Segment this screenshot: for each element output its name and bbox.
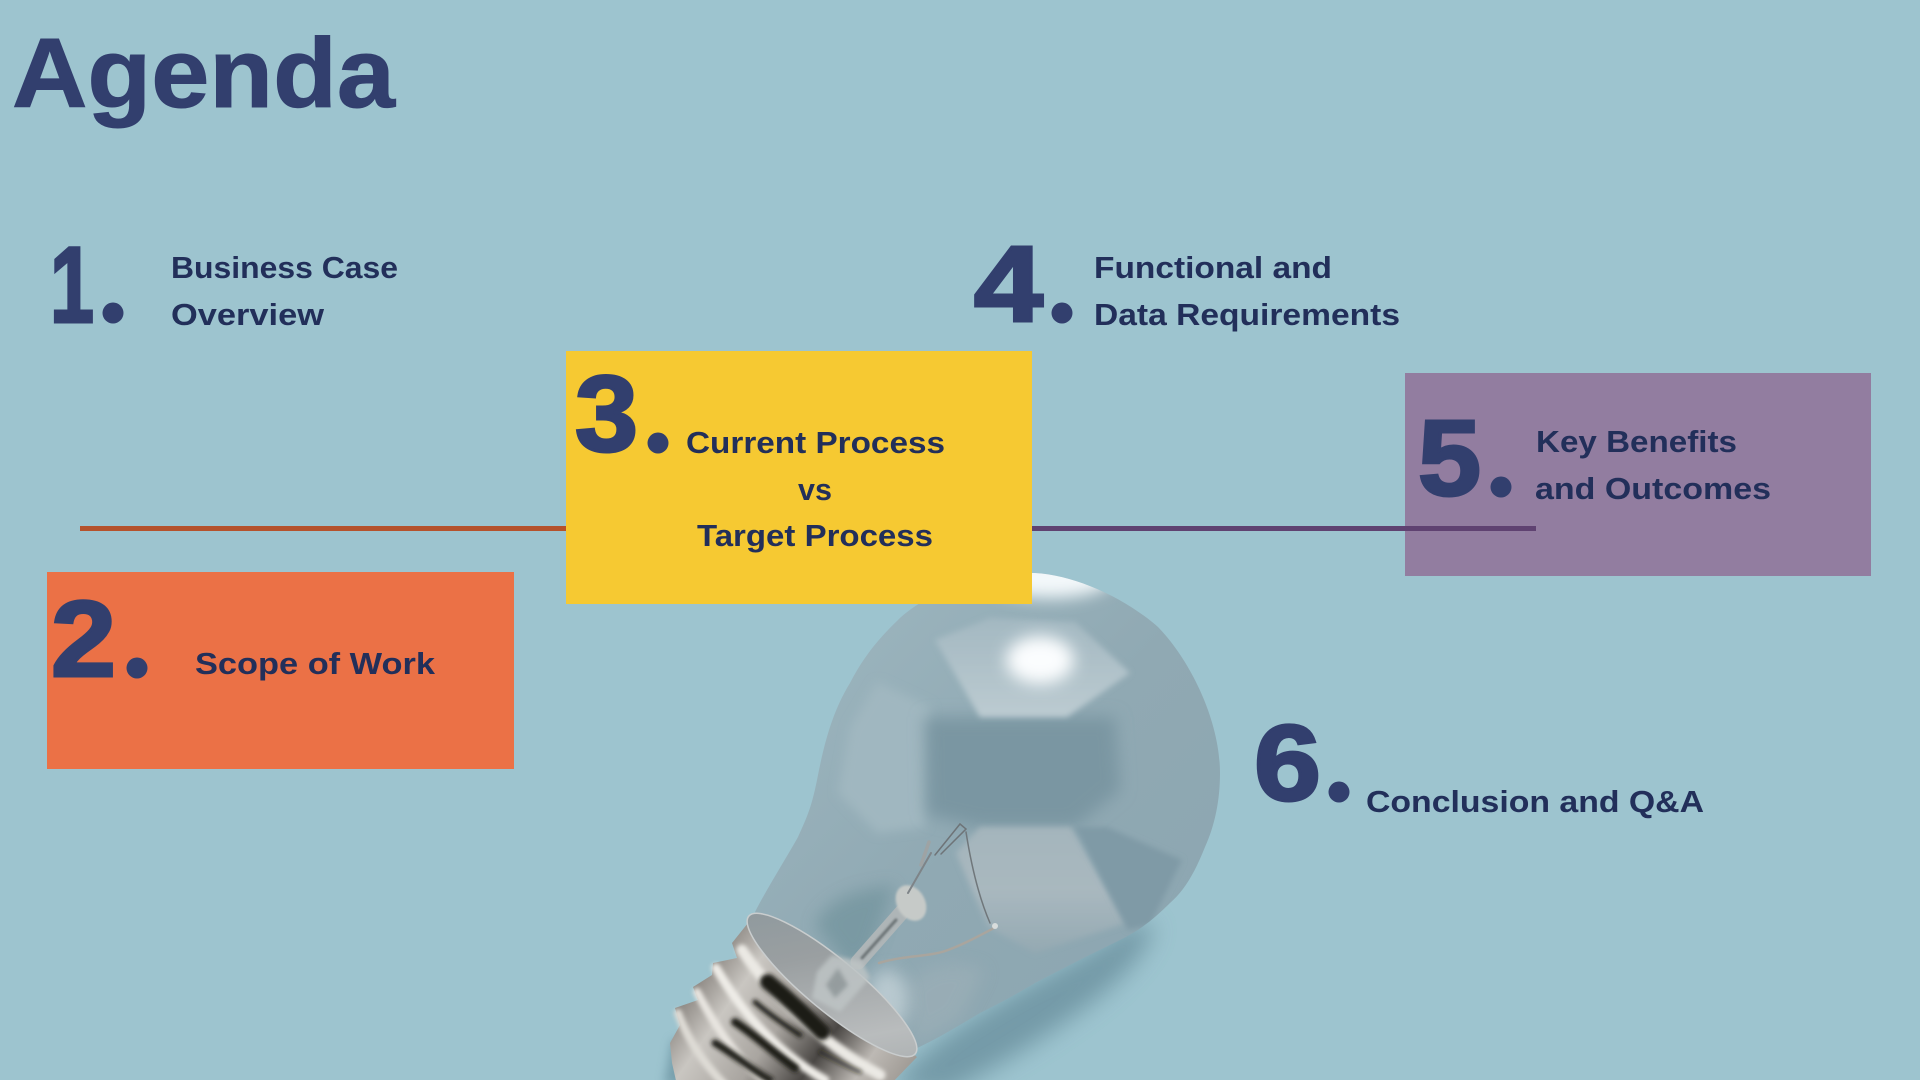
label xyxy=(1535,424,1771,506)
label xyxy=(1094,250,1400,332)
neck right glow xyxy=(868,970,908,1030)
label: Overview xyxy=(171,297,325,332)
label: Business Case xyxy=(171,250,398,285)
thread highlights xyxy=(678,950,880,1080)
label: Scope of Work xyxy=(195,646,436,681)
dot xyxy=(648,432,668,454)
dot xyxy=(1490,476,1512,498)
dot xyxy=(126,658,148,678)
upper rim glow xyxy=(1012,573,1110,608)
left window reflection xyxy=(842,692,925,830)
label: Data Requirements xyxy=(1094,297,1400,332)
label: Functional and xyxy=(1094,250,1332,285)
panel: step 2 orange box xyxy=(47,572,514,769)
label: Conclusion and Q&A xyxy=(1366,784,1704,819)
glass button xyxy=(889,880,933,926)
item 4: Functional and Data Requirements xyxy=(974,223,1400,344)
lower right darker lobe xyxy=(1075,827,1182,930)
label xyxy=(686,425,945,553)
number 6: 6 xyxy=(1254,702,1321,823)
dot xyxy=(1328,782,1350,802)
panel: step 3 yellow box xyxy=(566,351,1032,604)
number 1: 1 xyxy=(50,224,94,345)
number 2: 2 xyxy=(51,578,116,699)
upper window reflection xyxy=(935,618,1130,717)
label: vs xyxy=(798,472,832,507)
support wire xyxy=(908,853,931,893)
item 1: Business Case Overview xyxy=(50,224,398,345)
line: right timeline segment xyxy=(1032,526,1536,531)
number 5: 5 xyxy=(1418,397,1481,518)
lower left dark neck xyxy=(814,884,894,960)
stem base detail xyxy=(826,968,848,998)
dark centre xyxy=(925,717,1120,827)
number 3: 3 xyxy=(575,353,638,474)
lower window reflection xyxy=(956,827,1126,953)
label xyxy=(171,250,398,332)
line: left timeline segment xyxy=(80,526,570,531)
item 5: Key Benefits and Outcomes xyxy=(1418,397,1771,518)
rim dish xyxy=(732,896,932,1074)
light bulb photo illustration xyxy=(664,558,1240,1080)
label: Key Benefits xyxy=(1536,424,1737,459)
lower right neck shade xyxy=(917,973,969,1028)
item 2: Scope of Work xyxy=(51,578,436,699)
filament stem and wires xyxy=(858,824,998,963)
stem glass xyxy=(858,912,902,962)
lead wire xyxy=(879,927,996,963)
item 6: Conclusion and Q&A xyxy=(1254,702,1704,823)
socket body xyxy=(670,923,917,1080)
hook wire xyxy=(935,824,966,855)
dot xyxy=(102,302,124,324)
stem base glass xyxy=(812,955,870,1012)
metal screw base xyxy=(670,896,932,1080)
specular highlight xyxy=(1006,636,1074,684)
label: Current Process xyxy=(686,425,945,460)
socket cast shadow xyxy=(664,1040,700,1080)
title: Agenda xyxy=(12,18,397,128)
bulb cast shadow xyxy=(890,925,1155,1080)
dot xyxy=(1052,302,1072,324)
item 3: Current Process vs Target Process xyxy=(575,353,945,553)
label: Target Process xyxy=(697,518,933,553)
panel: step 5 purple box xyxy=(1405,373,1871,576)
number 4: 4 xyxy=(974,223,1043,344)
filament xyxy=(966,832,990,923)
label: and Outcomes xyxy=(1535,471,1771,506)
glass envelope xyxy=(755,573,1220,1048)
dark thread streaks xyxy=(715,982,860,1080)
